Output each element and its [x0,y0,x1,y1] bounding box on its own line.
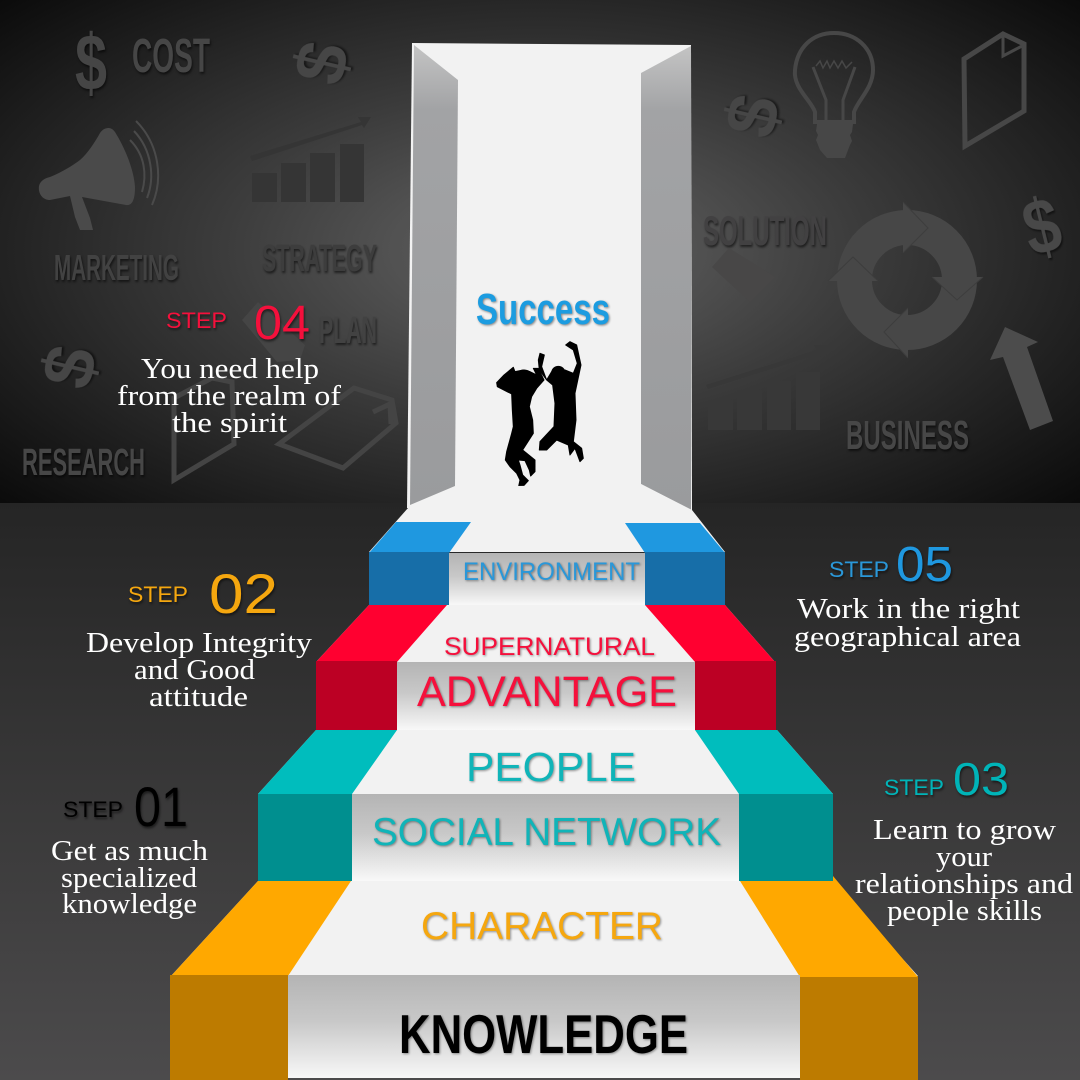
step text 05: Work in the right [797,594,1020,625]
doorway [407,43,692,512]
label: social network: SOCIAL NETWORK [372,811,721,854]
label: environment: ENVIRONMENT [463,558,640,586]
label: knowledge: KNOWLEDGE [399,1003,688,1065]
background: upper dark panel [0,0,1080,503]
step label 04: STEP [166,308,227,333]
background icons and words [22,18,1070,484]
step text 04: from the realm of [117,381,342,412]
label: advantage: ADVANTAGE [417,668,677,716]
word: business: BUSINESS [846,412,969,458]
step text 04: You need help [141,354,319,385]
callout: step 02 [86,562,312,713]
label: character: CHARACTER [421,905,663,948]
label: people: PEOPLE [466,744,636,790]
icon: light bulb [795,33,873,158]
step text 03: Learn to grow [873,815,1057,846]
icon: two people jumping [497,342,583,493]
step text 01 [51,836,208,920]
step: environment (blue) [369,522,725,605]
step text 02 [86,628,312,713]
icon: chevron below solution [712,248,775,302]
step text 02: attitude [149,682,248,713]
chart: rising bars right [706,345,827,430]
callout: step 03 [855,753,1073,927]
icon: cycle ring with four arrows [828,202,983,358]
step text 02: Develop Integrity [86,628,312,659]
step number 01: 01 [134,775,188,838]
icon: megaphone [39,121,158,230]
icon: dollar sign: $ [75,18,107,107]
word: strategy: STRATEGY [262,238,377,280]
staircase [170,484,918,1080]
icon: tilted dollar far right: $ [1014,180,1070,274]
step text 01: specialized [61,863,197,894]
background: lower dark panel [0,503,1080,1080]
step text 04 [117,354,342,439]
step number 02: 02 [209,562,278,625]
icon: rotated dollar top: $ [279,34,365,92]
icon: document top right [964,34,1024,146]
word: cost: COST [132,30,210,83]
icon: rotated dollar right: $ [710,87,796,145]
icon: tilted document two [279,388,396,468]
step label 01: STEP [63,797,123,822]
step number 03: 03 [953,753,1009,805]
word: solution: SOLUTION [703,207,827,254]
door left panel [410,45,458,505]
step number 05: 05 [896,538,953,592]
step text 03: your [936,842,993,873]
label: supernatural: SUPERNATURAL [444,633,655,661]
word: plan: PLAN [319,310,377,352]
step text 04: the spirit [172,408,287,439]
heading: success: Success [476,285,610,334]
icon: up arrow [990,327,1053,430]
step label 03: STEP [884,775,944,800]
step text 01: Get as much [51,836,208,867]
word: marketing: MARKETING [54,247,179,288]
step text 05 [794,594,1022,653]
word: research: RESEARCH [22,442,145,484]
icon: rotated dollar left: $ [27,338,113,396]
step: advantage (red) [316,605,776,730]
step number 04: 04 [254,297,310,350]
step label 05: STEP [829,557,889,582]
chart: rising bars left [250,117,371,202]
white treads [171,484,918,976]
door right panel [641,46,691,510]
icon: chevron behind step 04 [242,302,305,362]
callout: step 01 [51,775,208,920]
step text 03: people skills [887,896,1042,927]
step text 01: knowledge [62,889,197,920]
step: knowledge (orange) [170,876,918,1080]
callout: step 05 [794,538,1022,653]
step text 02: and Good [134,655,255,686]
callout: step 04 [117,297,342,439]
step: social network (teal) [258,730,833,881]
step text 05: geographical area [794,622,1022,653]
door frame [407,43,692,512]
step text 03 [855,815,1073,927]
icon: tilted document one [174,378,234,480]
step text 03: relationships and [855,869,1073,900]
step label 02: STEP [128,582,188,607]
